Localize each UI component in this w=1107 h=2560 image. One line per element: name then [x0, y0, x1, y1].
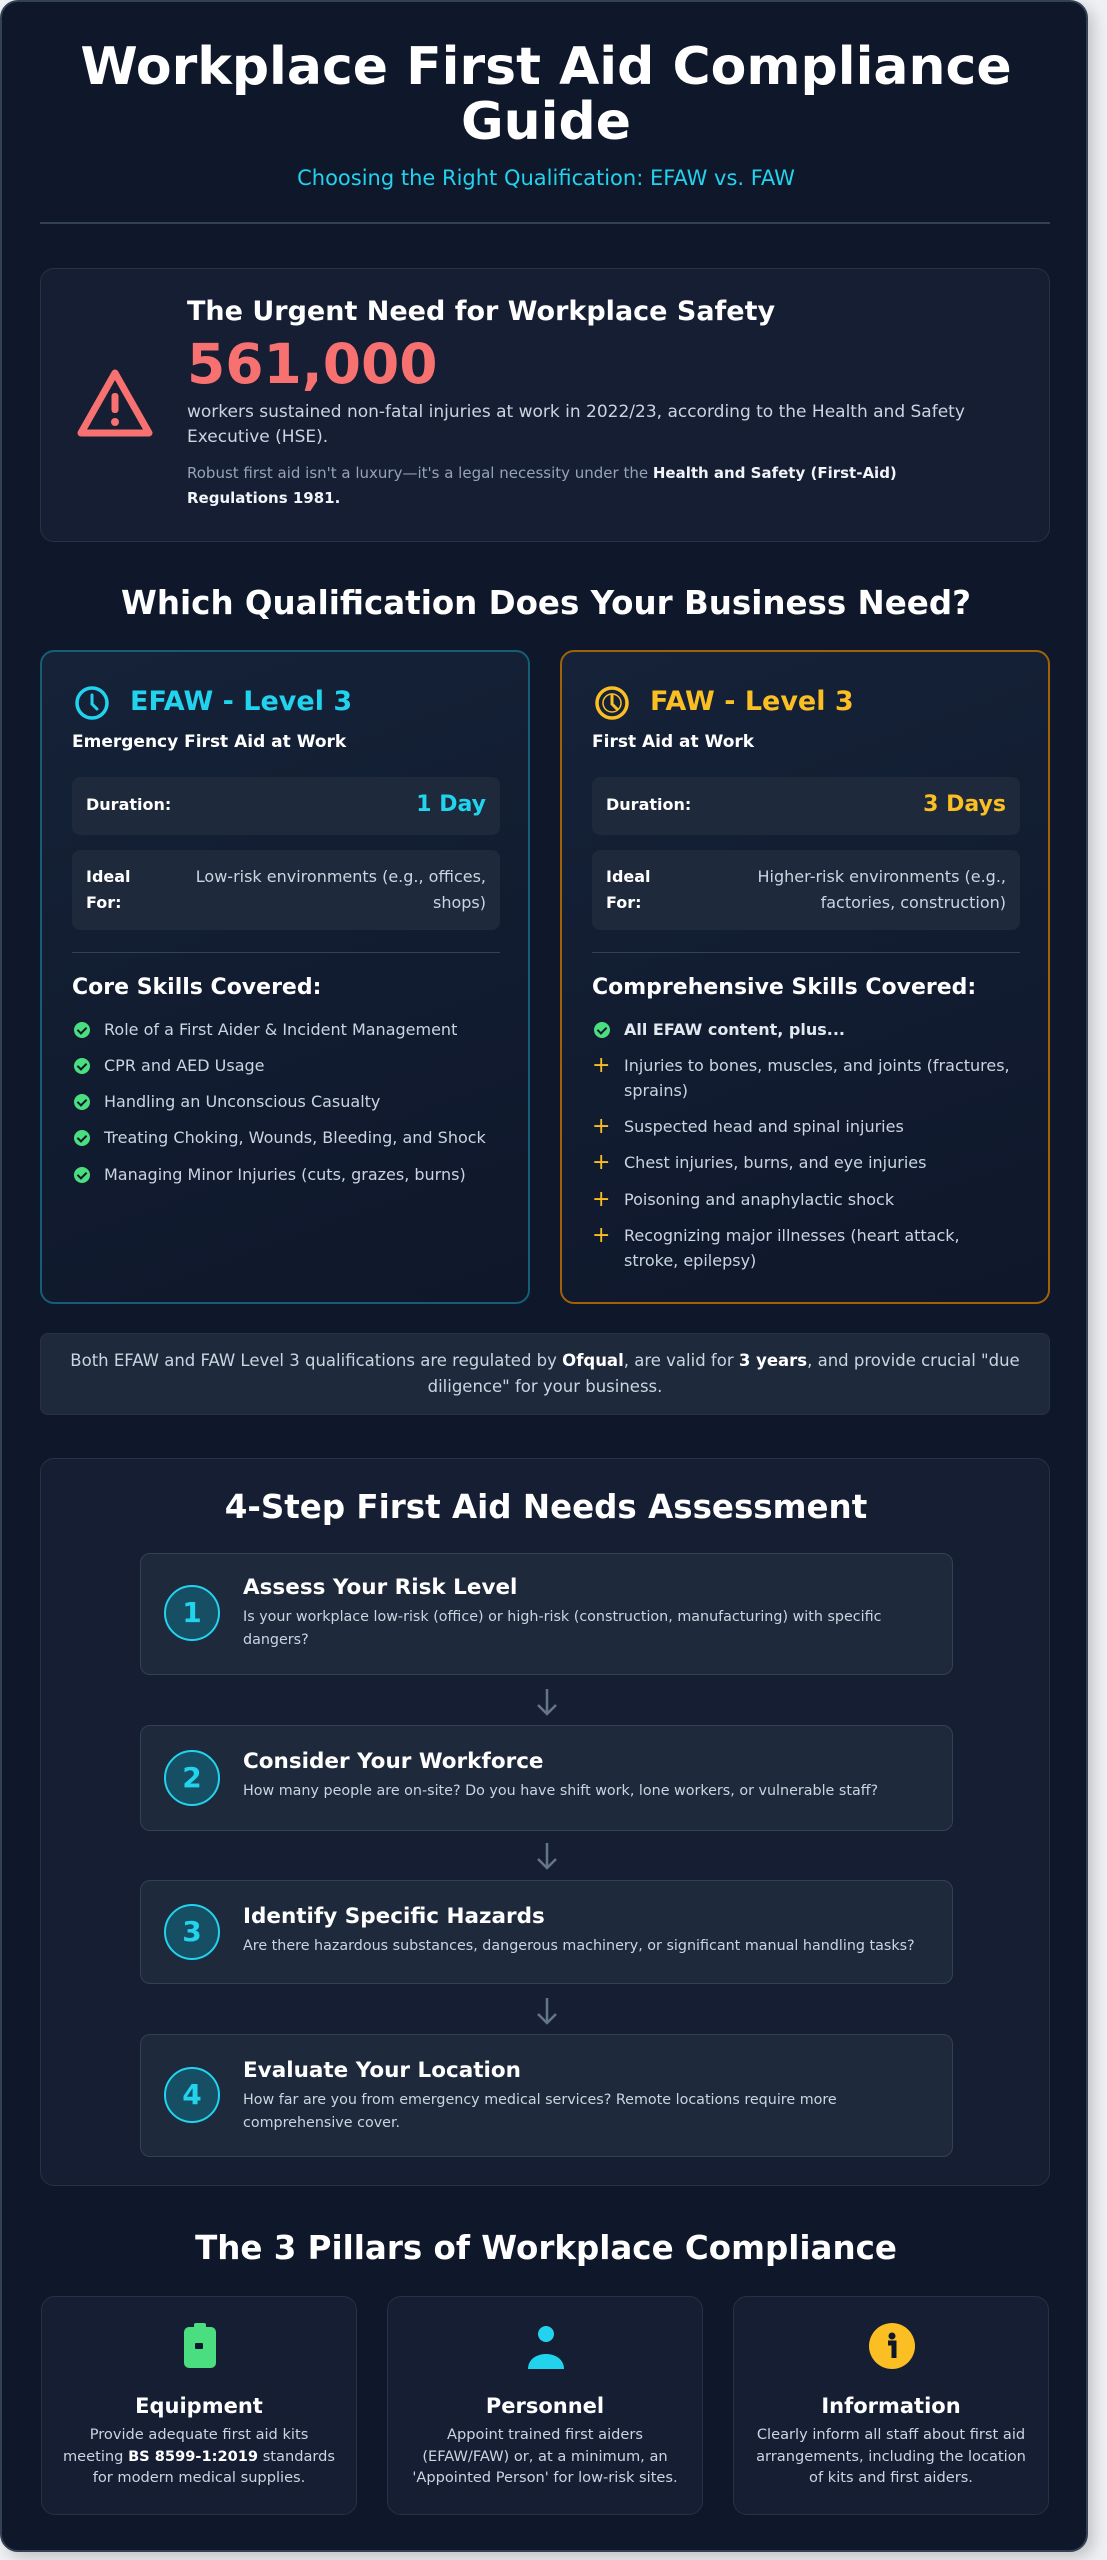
step 2: 2: [182, 1761, 202, 1794]
step 3: [140, 1880, 953, 1984]
heading: which qualification: Which Qualification Does Your Business Need?: [121, 584, 971, 622]
step 4: How far are you from emergency medical services? Remote locations require more comprehensive cover.: [243, 2092, 837, 2131]
skills list: Injuries to bones, muscles, and joints (fractures, sprains): [624, 1056, 1010, 1100]
icon: clock amber: [595, 686, 629, 720]
step 1: Is your workplace low-risk (office) or high-risk (construction, manufacturing) with specific dangers?: [243, 1609, 881, 1648]
panel: FAW: First Aid at Work: [592, 732, 754, 752]
skills list: [74, 1020, 486, 1184]
pillar: information: Information: [821, 2394, 961, 2418]
text block: workers sustained non-fatal injuries at work in 2022/23, according to the Health and Safety Executive (HSE).: [187, 402, 965, 447]
ideal for: Higher-risk environments (e.g., factories, construction): [758, 867, 1006, 912]
skills list: CPR and AED Usage: [104, 1056, 265, 1075]
ideal for: For:: [606, 893, 642, 912]
panel: assessment: [40, 1458, 1050, 2186]
duration: 1 Day: [416, 792, 486, 817]
panel: EFAW: Emergency First Aid at Work: [72, 732, 346, 752]
note: Robust first aid isn't a luxury—it's a legal necessity under the Health and Safety (First-Aid) Regulations 1981.: [187, 464, 897, 507]
heading: assessment: 4-Step First Aid Needs Assessment: [225, 1488, 867, 1526]
arrow 3: [537, 1998, 557, 2025]
skills list: +: [592, 1053, 610, 1078]
pillar: information: Clearly inform all staff about first aid arrangements, including the location of kits and first aiders.: [756, 2426, 1026, 2486]
duration: 3 Days: [923, 792, 1006, 817]
skills list: Recognizing major illnesses (heart attack, stroke, epilepsy): [624, 1226, 960, 1270]
step 2: How many people are on-site? Do you have shift work, lone workers, or vulnerable staff?: [243, 1783, 878, 1799]
subtitle: Choosing the Right Qualification: EFAW vs. FAW: [297, 166, 795, 190]
icon: info: [869, 2323, 915, 2369]
pillar: equipment: [41, 2296, 357, 2515]
arrow 1: [537, 1689, 557, 1716]
panel: FAW: [560, 650, 1050, 1304]
ideal for: [592, 850, 1020, 930]
skills list: Treating Choking, Wounds, Bleeding, and Shock: [104, 1128, 486, 1147]
pillar: personnel: Appoint trained first aiders (EFAW/FAW) or, at a minimum, an 'Appointed Person' for low-risk sites.: [412, 2426, 678, 2486]
heading: The Urgent Need for Workplace Safety: [187, 296, 775, 327]
pillar: personnel: Personnel: [486, 2394, 604, 2418]
icon: kit: [184, 2323, 216, 2368]
step 1: [140, 1553, 953, 1675]
ideal for: Ideal: [606, 867, 651, 886]
heading: pillars: The 3 Pillars of Workplace Compliance: [195, 2229, 897, 2267]
step 1: Assess Your Risk Level: [243, 1575, 517, 1600]
stat: 561,000: [187, 332, 438, 396]
duration: [592, 777, 1020, 835]
skills list: All EFAW content, plus...: [624, 1020, 845, 1039]
pillar: personnel: [387, 2296, 703, 2515]
skills list: Suspected head and spinal injuries: [624, 1117, 904, 1136]
skills list: Role of a First Aider & Incident Management: [104, 1020, 457, 1039]
step 2: [140, 1725, 953, 1831]
step 3: Are there hazardous substances, dangerous machinery, or significant manual handling tasks?: [243, 1938, 915, 1954]
skills list: +: [592, 1114, 610, 1139]
step 4: Evaluate Your Location: [243, 2058, 521, 2083]
ideal for: [72, 850, 500, 930]
panel: urgent need: [40, 268, 1050, 542]
step 4: 4: [182, 2078, 202, 2111]
skills list: +: [592, 1150, 610, 1175]
skills list: Chest injuries, burns, and eye injuries: [624, 1153, 926, 1172]
skills list: +: [592, 1223, 610, 1248]
skills list: [592, 1020, 1010, 1270]
skills list: +: [592, 1187, 610, 1212]
skills heading: Comprehensive Skills Covered:: [592, 975, 976, 1000]
icon: person: [528, 2326, 564, 2369]
title: Workplace First Aid Compliance: [80, 37, 1012, 97]
icon: warning: [78, 370, 152, 436]
step 3: 3: [182, 1915, 202, 1948]
callout: regulation note: Both EFAW and FAW Level 3 qualifications are regulated by Ofqual, are valid for 3 years, and provide crucial "due diligence" for your business.: [70, 1351, 1020, 1396]
arrow 2: [537, 1843, 557, 1870]
step 1: 1: [182, 1596, 202, 1629]
step 3: Identify Specific Hazards: [243, 1904, 545, 1929]
skills list: Managing Minor Injuries (cuts, grazes, burns): [104, 1165, 466, 1184]
step 4: [140, 2034, 953, 2157]
duration: [72, 777, 500, 835]
skills list: Poisoning and anaphylactic shock: [624, 1190, 894, 1209]
pillar: equipment: Equipment: [135, 2394, 263, 2418]
card title: FAW - Level 3: [650, 686, 854, 717]
skills heading: Core Skills Covered:: [72, 975, 321, 1000]
step 2: Consider Your Workforce: [243, 1749, 544, 1774]
skills list: Handling an Unconscious Casualty: [104, 1092, 380, 1111]
pillar: information: [733, 2296, 1049, 2515]
card title: EFAW - Level 3: [130, 686, 352, 717]
callout: regulation note: [40, 1333, 1050, 1415]
pillar: equipment: Provide adequate first aid kits meeting BS 8599-1:2019 standards for modern medical supplies.: [63, 2426, 335, 2486]
title: [80, 37, 1012, 152]
ideal for: Ideal: [86, 867, 131, 886]
duration: Duration:: [86, 795, 171, 814]
duration: Duration:: [606, 795, 691, 814]
icon: clock cyan: [75, 686, 109, 720]
ideal for: Low-risk environments (e.g., offices, shops): [196, 867, 486, 912]
panel: EFAW: [40, 650, 530, 1304]
title: Guide: [461, 92, 631, 152]
ideal for: For:: [86, 893, 122, 912]
